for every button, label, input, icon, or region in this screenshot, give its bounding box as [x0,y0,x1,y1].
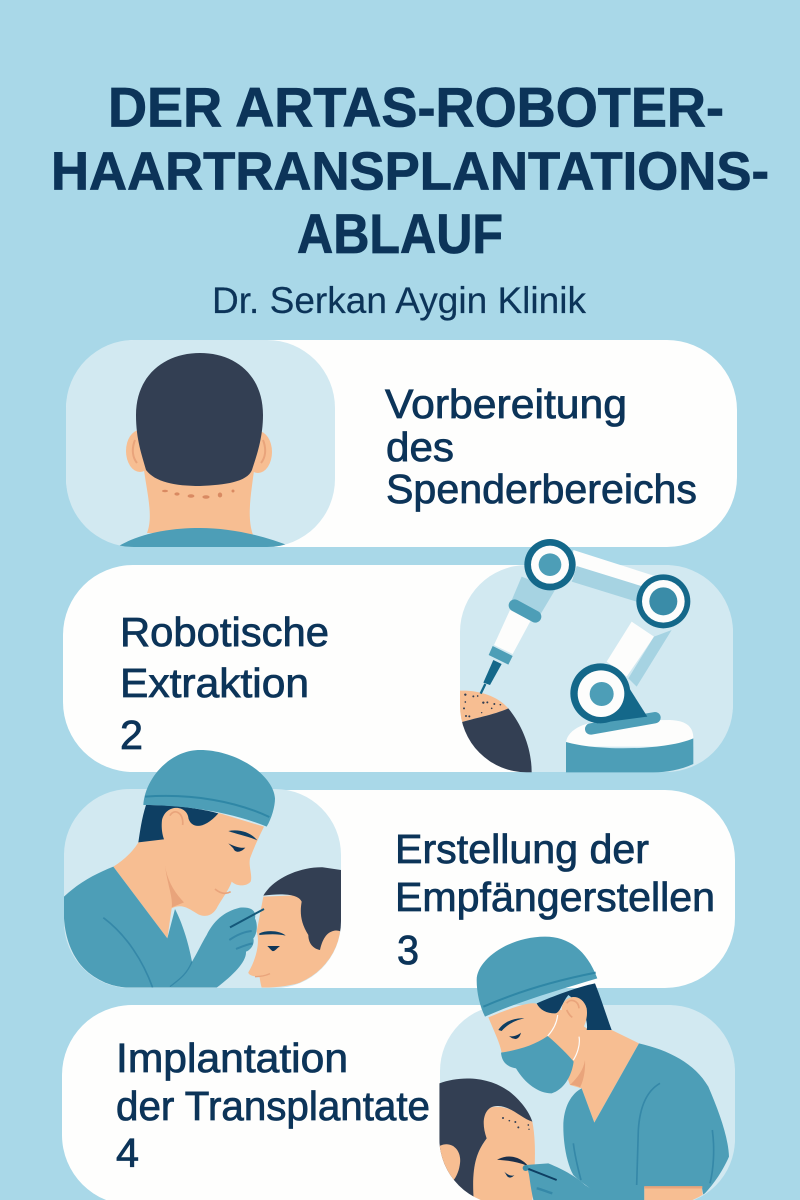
surgeon head and neck [113,808,264,938]
text: step 4 label: 4 [116,1130,139,1176]
base [566,720,693,747]
text: step 2 label [120,609,329,758]
text: step 2 label: 2 [120,712,143,758]
title: ABLAUF [297,202,503,265]
text: step 2 label: Extraktion [120,660,309,706]
surgical mask [501,1036,574,1093]
surgical cap [143,750,275,827]
text: step 3 label [395,826,715,973]
joints [597,668,647,723]
icon: robot arm at scalp [460,539,693,772]
surgical cap [477,937,597,1017]
panel: step 2 [63,539,733,772]
text: step 3 label: 3 [397,927,419,973]
title: HAARTRANSPLANTATIONS- [51,142,769,202]
scrubs [563,1043,729,1200]
icon: masked surgeon implanting grafts [439,937,729,1200]
gloved hand with tool [170,907,264,988]
panel: step 3 [64,750,735,988]
scrubs [64,867,192,988]
text: step 4 label [116,1035,430,1176]
title [51,76,769,265]
arm segments [572,550,657,602]
scalp [460,691,532,772]
text: step 3 label: Erstellung der [395,826,649,872]
surgeon skin [488,1003,639,1123]
text: step 1 label: des [386,424,454,470]
icon: head from behind with donor area [117,353,292,547]
patient [473,1107,535,1200]
subtitle: Dr. Serkan Aygin Klinik [212,280,586,321]
text: step 1 label: Spenderbereichs [386,466,697,512]
patient [248,867,342,988]
text: step 4 label: Implantation [116,1035,348,1081]
text: step 1 label: Vorbereitung [385,381,627,427]
panel: step 4 [62,937,735,1200]
icon: surgeon marking recipient sites [64,750,342,988]
text: step 4 label: der Transplantate [116,1083,430,1129]
title: DER ARTAS-ROBOTER- [108,76,724,138]
text: step 3 label: Empfängerstellen [395,874,715,920]
gloved hand with tool [526,1163,606,1200]
panel: step 1 [66,340,737,547]
text: step 1 label [385,381,697,512]
text: step 2 label: Robotische [120,609,329,655]
